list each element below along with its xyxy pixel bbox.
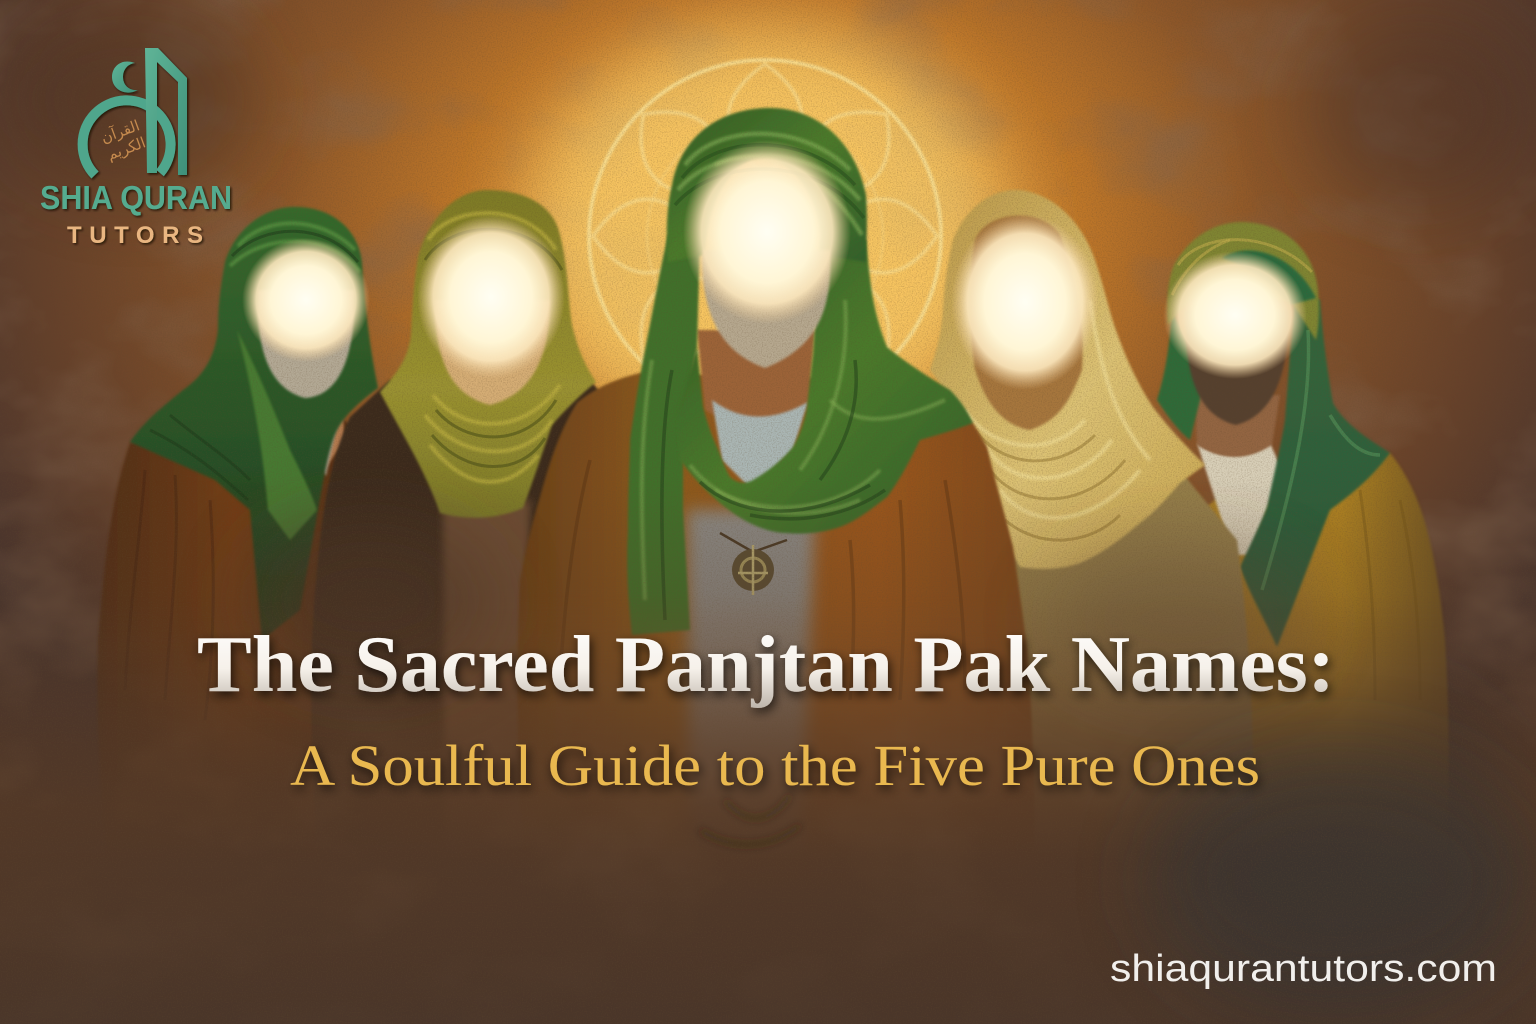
figure: fourth from left, pale yellow veil xyxy=(930,190,1251,777)
logo mark: crescent, arch and tower xyxy=(83,48,187,175)
hood interior and neck xyxy=(970,216,1083,430)
logo calligraphy: القرآن xyxy=(98,116,142,147)
olive veil xyxy=(380,190,596,518)
lower haze fading the figures into the background xyxy=(0,480,1536,1024)
pendant xyxy=(720,533,787,595)
title: The Sacred Panjtan Pak Names: xyxy=(197,619,1335,709)
figure: central, green turban and brown robe xyxy=(518,108,1035,880)
pale veil xyxy=(930,190,1205,569)
blue-grey collar xyxy=(712,400,808,490)
left scarf xyxy=(1157,310,1205,440)
logo calligraphy xyxy=(98,116,148,164)
halo: geometric rosette behind the central figure xyxy=(589,60,941,412)
figure: far left, green turban xyxy=(98,205,380,744)
left hanging scarf xyxy=(627,235,700,635)
head and beard xyxy=(1187,340,1288,426)
figure: far right, green and olive turban xyxy=(1156,221,1448,782)
figure: second from left, olive veil xyxy=(312,188,599,752)
logo calligraphy: الكريم xyxy=(105,133,148,164)
shirt front xyxy=(680,499,824,794)
website address: shiaqurantutors.com xyxy=(1110,948,1497,990)
faint clasped hands xyxy=(700,795,800,844)
cowl and right scarf xyxy=(677,240,973,534)
turban xyxy=(1167,222,1319,340)
glowing faces xyxy=(242,140,1307,390)
neck xyxy=(435,300,550,405)
logo wordmark: SHIA QURAN xyxy=(40,179,232,216)
five figures, fading into the lower background xyxy=(98,106,1448,788)
turban xyxy=(667,108,867,262)
subtitle: A Soulful Guide to the Five Pure Ones xyxy=(290,733,1260,798)
neck xyxy=(697,330,815,425)
right scarf xyxy=(1240,290,1390,647)
logo tagline: TUTORS xyxy=(67,222,203,249)
head and beard xyxy=(258,290,354,398)
scarf and turban xyxy=(130,207,378,640)
head and beard xyxy=(703,250,830,368)
logo: Shia Quran Tutors xyxy=(40,48,232,249)
